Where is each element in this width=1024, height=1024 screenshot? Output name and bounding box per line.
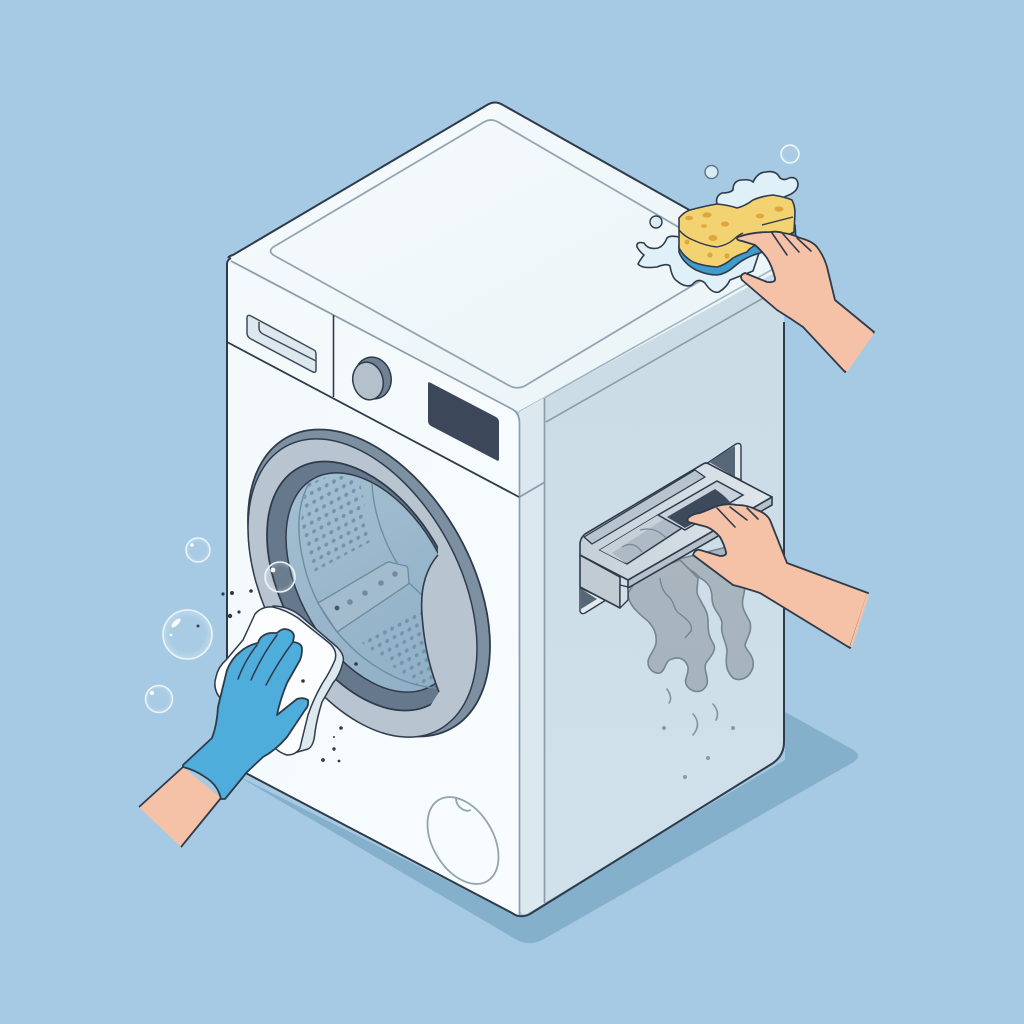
panel: detergent dispenser with sludge <box>580 443 772 692</box>
sponge yellow body <box>679 195 795 267</box>
door glass edge <box>422 555 439 692</box>
suds: foam above sponge <box>717 172 798 215</box>
panel: top face <box>227 102 781 412</box>
dispenser front face <box>580 555 620 608</box>
drum paddle <box>318 562 409 632</box>
panel divider <box>332 315 334 397</box>
forearm: left <box>139 767 221 847</box>
detergent drawer handle <box>247 315 316 372</box>
corner strip lines <box>231 261 545 915</box>
forearm outlines <box>139 767 221 847</box>
sludge left mass <box>628 560 715 692</box>
glove finger lines <box>238 635 293 685</box>
sponge top surface edge <box>679 217 793 247</box>
left compartment <box>600 515 682 564</box>
illustration: washing machine being cleaned <box>138 102 875 944</box>
speck on cloth <box>301 679 305 683</box>
bubble small bottom <box>146 686 172 712</box>
door gasket <box>266 460 439 712</box>
left compartment bevel <box>600 515 664 564</box>
cloth back layer <box>272 606 343 755</box>
finger lines <box>717 507 758 527</box>
compartment residue <box>622 529 666 552</box>
front slot dark <box>581 589 597 609</box>
top inset outline <box>270 120 735 388</box>
panel: corner strip <box>519 397 545 915</box>
control panel bottom line <box>227 342 519 497</box>
drum inner lines <box>299 483 436 688</box>
blue glove <box>183 629 308 799</box>
dirt specks below sludge <box>662 689 735 779</box>
washing machine <box>227 102 784 916</box>
cloth front layer <box>215 607 336 755</box>
bubble large <box>163 610 212 659</box>
drum interior <box>285 472 438 693</box>
floor shadow <box>236 712 858 943</box>
cloth <box>215 606 343 755</box>
panel: front face <box>227 261 520 916</box>
door outer rim <box>248 380 490 786</box>
machine back edges <box>228 102 700 258</box>
perforations lower <box>362 612 435 686</box>
bubble on door <box>265 562 295 592</box>
control knob <box>349 353 396 403</box>
drum opening <box>266 460 439 712</box>
perforations upper <box>300 474 372 572</box>
panel: right side <box>519 264 784 913</box>
right compartment dark interior <box>667 489 730 528</box>
dirt specks around cloth <box>196 589 358 762</box>
arm end cover <box>846 333 873 371</box>
hand: scrubbing with sponge <box>737 232 874 372</box>
front slot <box>580 588 606 614</box>
rear slot <box>706 443 741 480</box>
drain cover <box>428 784 498 897</box>
bubble small top <box>186 538 210 562</box>
rear slot dark <box>709 446 735 477</box>
bubbles on the left <box>146 538 295 712</box>
dispenser upper strip <box>584 470 705 544</box>
sponge <box>679 195 796 275</box>
dispenser right lip <box>628 497 772 588</box>
machine outer outlines <box>227 258 784 916</box>
dispenser front tab <box>620 585 628 608</box>
door <box>247 428 491 738</box>
right compartment <box>658 481 743 530</box>
door face ring <box>248 392 477 784</box>
bubbles near sponge <box>650 145 799 228</box>
sludge contour line <box>660 578 691 638</box>
sludge right blob <box>675 545 753 680</box>
finger lines <box>772 233 811 255</box>
hand: on dispenser <box>688 504 868 648</box>
sponge holes <box>685 206 784 259</box>
sponge blue layer <box>679 225 796 275</box>
arm end cover <box>851 594 868 647</box>
dispenser top frame <box>580 463 772 580</box>
display screen <box>428 382 499 461</box>
side edge and groove lines <box>519 268 775 422</box>
suds: splash on top <box>637 225 760 292</box>
